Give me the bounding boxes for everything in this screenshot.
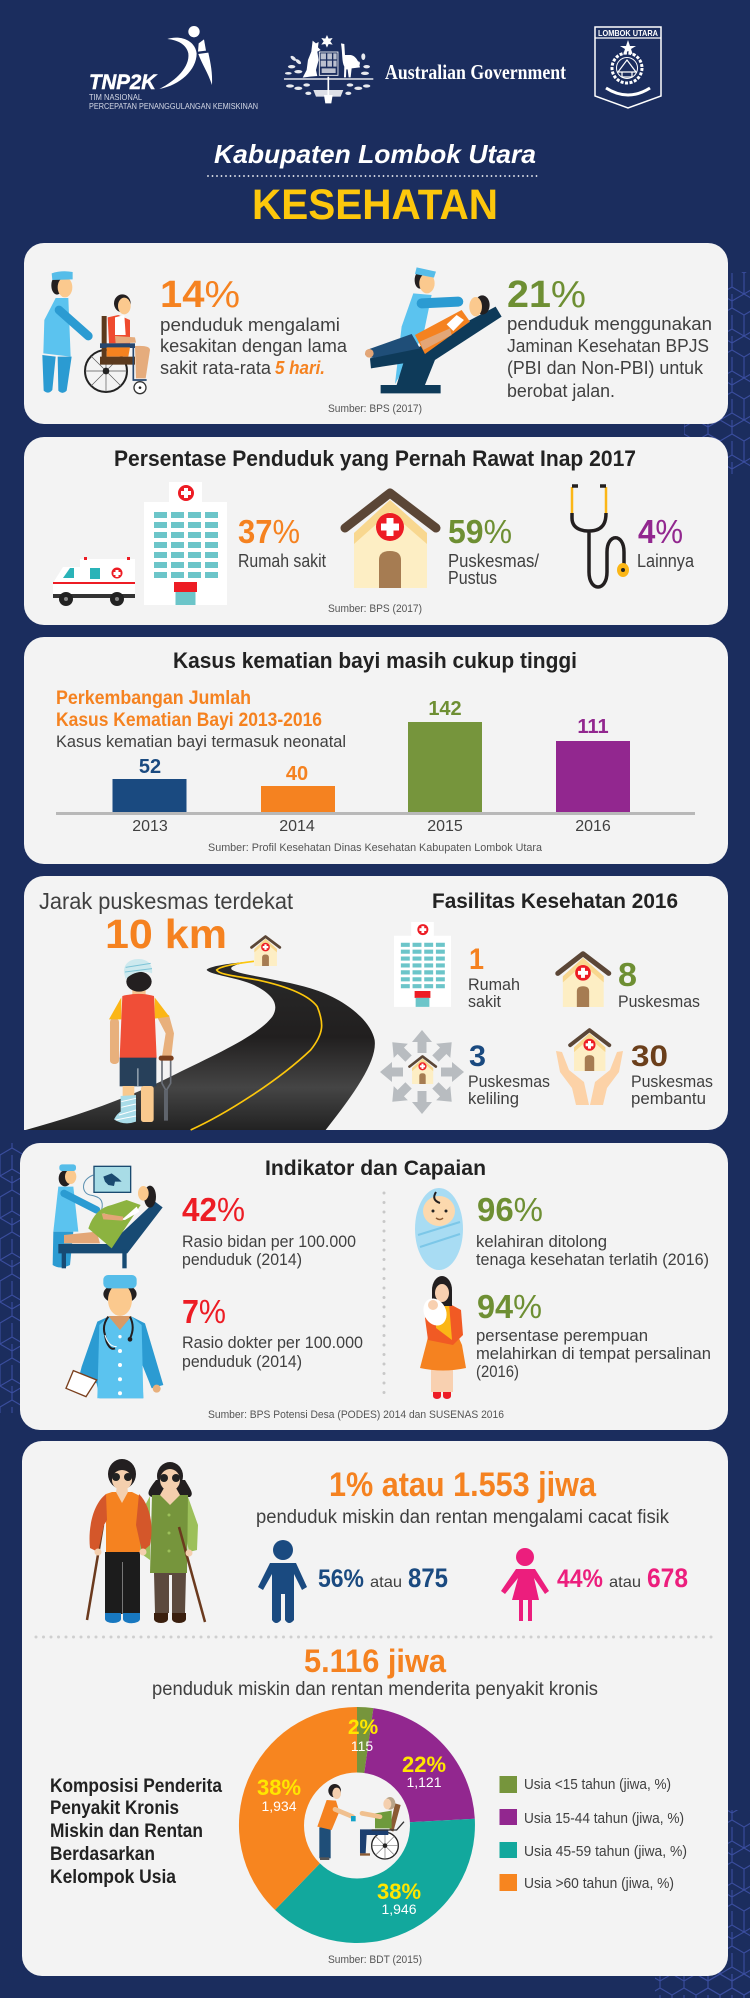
stat: 94%: melahirkan di tempat persalinan	[476, 1344, 711, 1363]
bar chart: 2013	[132, 818, 168, 835]
icon: nurse pushing wheelchair	[42, 271, 150, 394]
panel: cacat fisik dan penyakit kronis	[22, 1441, 728, 1976]
panel: indikator dan capaian	[20, 1143, 728, 1430]
donut chart	[239, 1707, 475, 1943]
labels: slice values: 1,934	[261, 1798, 297, 1814]
illustration: injured person with crutch	[109, 959, 174, 1123]
stat: 59% puskesmas: Puskesmas/	[448, 551, 539, 571]
stat: 94%: 94%	[477, 1288, 542, 1325]
labels: slice values: 115	[351, 1738, 373, 1754]
stat: 7% dokter: 7%	[182, 1293, 226, 1330]
text: 5.116 jiwa: 5.116 jiwa	[304, 1643, 446, 1679]
icon: stethoscope	[572, 486, 629, 587]
bar chart: 111	[577, 716, 609, 738]
stat: 21%	[507, 274, 712, 401]
text: 1% atau 1.553 jiwa	[256, 1466, 669, 1528]
labels: slice values: 38%	[377, 1879, 421, 1904]
facility: puskesmas	[558, 954, 700, 1011]
panel: sakit dan jaminan kesehatan	[24, 243, 728, 424]
bar chart: 142	[428, 698, 462, 720]
header logos	[89, 26, 661, 111]
source: Sumber: BPS (2017)	[328, 603, 422, 615]
stat: 96%	[476, 1191, 709, 1269]
title: KESEHATAN	[252, 181, 498, 229]
legend: Usia 15-44 tahun (jiwa, %)	[524, 1810, 684, 1827]
stat: 37% rumah sakit: Rumah sakit	[238, 551, 326, 571]
stat: 42% bidan	[182, 1191, 356, 1269]
stat: 59% puskesmas: Pustus	[448, 568, 497, 588]
facility: puskesmas pembantu	[556, 1030, 713, 1108]
chart title	[56, 688, 346, 751]
facility: rumah sakit	[394, 922, 520, 1011]
stat: 7% dokter: penduduk (2014)	[182, 1352, 302, 1371]
stat: 7% dokter: Rasio dokter per 100.000	[182, 1333, 363, 1352]
stat: female: 44%	[557, 1565, 603, 1593]
labels: slice values: 1,121	[406, 1774, 442, 1790]
stat: male	[258, 1540, 448, 1623]
source: Sumber: BPS (2017)	[328, 403, 422, 415]
heading: fasilitas: Fasilitas Kesehatan 2016	[432, 890, 678, 913]
bar chart: 2016	[575, 818, 611, 835]
panel: rawat inap	[24, 437, 728, 625]
stat: male: 56%	[318, 1565, 364, 1593]
stat: 21%: berobat jalan.	[507, 381, 615, 401]
labels: slice values	[257, 1716, 446, 1917]
heading: Kasus kematian bayi masih cukup tinggi	[173, 648, 577, 673]
icon: small puskesmas	[252, 937, 280, 966]
icon: dentist and patient	[365, 267, 502, 393]
stat: 94%: (2016)	[476, 1362, 519, 1381]
bar chart: 2014	[279, 818, 315, 835]
icon: helper and wheelchair user	[317, 1784, 404, 1860]
stat: female: 678	[647, 1563, 688, 1593]
legend: Usia 45-59 tahun (jiwa, %)	[524, 1843, 687, 1860]
legend: Usia >60 tahun (jiwa, %)	[524, 1875, 674, 1892]
facility: puskesmas keliling: Puskesmas	[468, 1072, 550, 1091]
icon: midwife ultrasound	[53, 1164, 163, 1268]
stat: 94%: persentase perempuan	[476, 1326, 648, 1345]
chart title: Kasus Kematian Bayi 2013-2016	[56, 710, 322, 731]
stat: 14%: 14%	[160, 274, 240, 316]
logo: Lombok Utara shield: LOMBOK UTARA	[598, 28, 658, 38]
text: komposisi penderita: Penyakit Kronis	[50, 1798, 179, 1819]
logo: Australian Government: Australian Government	[385, 60, 566, 84]
facility: puskesmas pembantu: 30	[631, 1040, 668, 1073]
facility: puskesmas keliling: keliling	[468, 1089, 519, 1108]
chart title: Perkembangan Jumlah	[56, 688, 251, 709]
icon: mother and baby	[419, 1276, 466, 1399]
heading: Persentase Penduduk yang Pernah Rawat Inap 2017	[114, 446, 636, 471]
stat: 21%: 21%	[507, 274, 586, 316]
icon: blind couple	[87, 1459, 205, 1623]
bar chart	[56, 698, 695, 835]
stat: 14%: kesakitan dengan lama	[160, 336, 348, 356]
stat: male: atau	[370, 1574, 402, 1591]
stat: 94%	[476, 1288, 711, 1381]
facility: puskesmas keliling	[380, 1030, 550, 1114]
text: 5.116 jiwa: penduduk miskin dan rentan menderita penyakit kronis	[152, 1679, 598, 1700]
logo: Australian Government	[284, 35, 566, 103]
stat: 14%	[160, 274, 348, 378]
icon: hospital	[144, 482, 227, 605]
icon: puskesmas house	[345, 493, 436, 588]
text: komposisi penderita	[50, 1776, 222, 1888]
stat: 7% dokter	[182, 1293, 363, 1371]
source: Sumber: Profil Kesehatan Dinas Kesehatan Kabupaten Lombok Utara	[208, 842, 543, 854]
stat: 21%: Jaminan Kesehatan BPJS	[507, 336, 709, 356]
labels: slice values: 38%	[257, 1775, 301, 1800]
source: Sumber: BPS Potensi Desa (PODES) 2014 dan SUSENAS 2016	[208, 1409, 504, 1421]
facility: puskesmas keliling: 3	[469, 1040, 486, 1073]
stat: 14%: 5 hari.	[275, 358, 325, 378]
icon: ambulance	[53, 557, 135, 606]
labels: slice values: 2%	[348, 1716, 378, 1739]
stat: 4% lainnya	[637, 513, 695, 571]
chart title: Kasus kematian bayi termasuk neonatal	[56, 732, 346, 751]
title	[208, 139, 541, 229]
text: 1% atau 1.553 jiwa: penduduk miskin dan rentan mengalami cacat fisik	[256, 1507, 669, 1528]
stat: 14%: sakit rata-rata	[160, 358, 272, 378]
stat: 37% rumah sakit	[238, 513, 326, 571]
facility: rumah sakit: 1	[469, 943, 484, 976]
stat: 96%: 96%	[477, 1191, 543, 1228]
logo: TNP2K	[89, 26, 258, 111]
stat: 96%: tenaga kesehatan terlatih (2016)	[476, 1250, 709, 1269]
illustration: road	[26, 961, 375, 1130]
stat: 21%: (PBI dan Non-PBI) untuk	[507, 358, 704, 378]
stat: 4% lainnya: Lainnya	[637, 551, 695, 571]
text: 1% atau 1.553 jiwa: 1% atau 1.553 jiwa	[329, 1466, 597, 1504]
stat: male: 875	[408, 1563, 448, 1593]
stat: 14%: penduduk mengalami	[160, 315, 340, 335]
facility: puskesmas: Puskesmas	[618, 992, 700, 1011]
labels: slice values: 1,946	[381, 1901, 417, 1917]
labels: slice values: 22%	[402, 1752, 446, 1777]
panel: kematian bayi	[24, 637, 728, 864]
text: komposisi penderita: Komposisi Penderita	[50, 1776, 222, 1797]
text: jarak puskesmas: 10 km	[105, 911, 227, 957]
stat: 59% puskesmas	[448, 513, 539, 588]
bar chart: 2015	[427, 818, 463, 835]
stat: 37% rumah sakit: 37%	[238, 513, 300, 550]
facility: rumah sakit: Rumah	[468, 975, 520, 994]
bar chart: 40	[286, 763, 308, 785]
stat: 96%: kelahiran ditolong	[476, 1232, 607, 1251]
logo: TNP2K: PERCEPATAN PENANGGULANGAN KEMISKINAN	[89, 102, 258, 111]
text: komposisi penderita: Kelompok Usia	[50, 1867, 176, 1888]
source: Sumber: BDT (2015)	[328, 1954, 422, 1966]
facility: puskesmas pembantu: Puskesmas	[631, 1072, 713, 1091]
stat: 42% bidan: penduduk (2014)	[182, 1250, 302, 1269]
legend: Usia <15 tahun (jiwa, %)	[524, 1776, 671, 1793]
facility: rumah sakit: sakit	[468, 992, 501, 1011]
stat: 21%: penduduk menggunakan	[507, 314, 712, 334]
bar chart: 52	[139, 756, 161, 778]
text: jarak puskesmas	[39, 888, 294, 957]
stat: female	[501, 1548, 688, 1621]
legend	[500, 1776, 687, 1892]
heading: Indikator dan Capaian	[265, 1157, 486, 1180]
icon: swaddled baby	[415, 1188, 463, 1270]
logo: TNP2K: TNP2K	[89, 71, 158, 94]
stat: 42% bidan: 42%	[182, 1191, 245, 1228]
stat: 59% puskesmas: 59%	[448, 513, 512, 550]
facility: puskesmas: 8	[618, 956, 637, 993]
stat: female: atau	[609, 1574, 641, 1591]
facility: puskesmas pembantu: pembantu	[631, 1089, 706, 1108]
text: komposisi penderita: Miskin dan Rentan	[50, 1821, 203, 1842]
stat: 4% lainnya: 4%	[638, 513, 683, 550]
panel: jarak dan fasilitas	[24, 876, 728, 1130]
text: jarak puskesmas: Jarak puskesmas terdekat	[39, 888, 294, 914]
text: komposisi penderita: Berdasarkan	[50, 1844, 155, 1865]
icon: doctor	[66, 1275, 163, 1398]
logo: Lombok Utara shield	[595, 27, 661, 108]
logo: TNP2K: TIM NASIONAL	[89, 93, 143, 102]
stat: 42% bidan: Rasio bidan per 100.000	[182, 1232, 356, 1251]
title: Kabupaten Lombok Utara	[214, 139, 536, 169]
text: 5.116 jiwa	[152, 1643, 598, 1700]
